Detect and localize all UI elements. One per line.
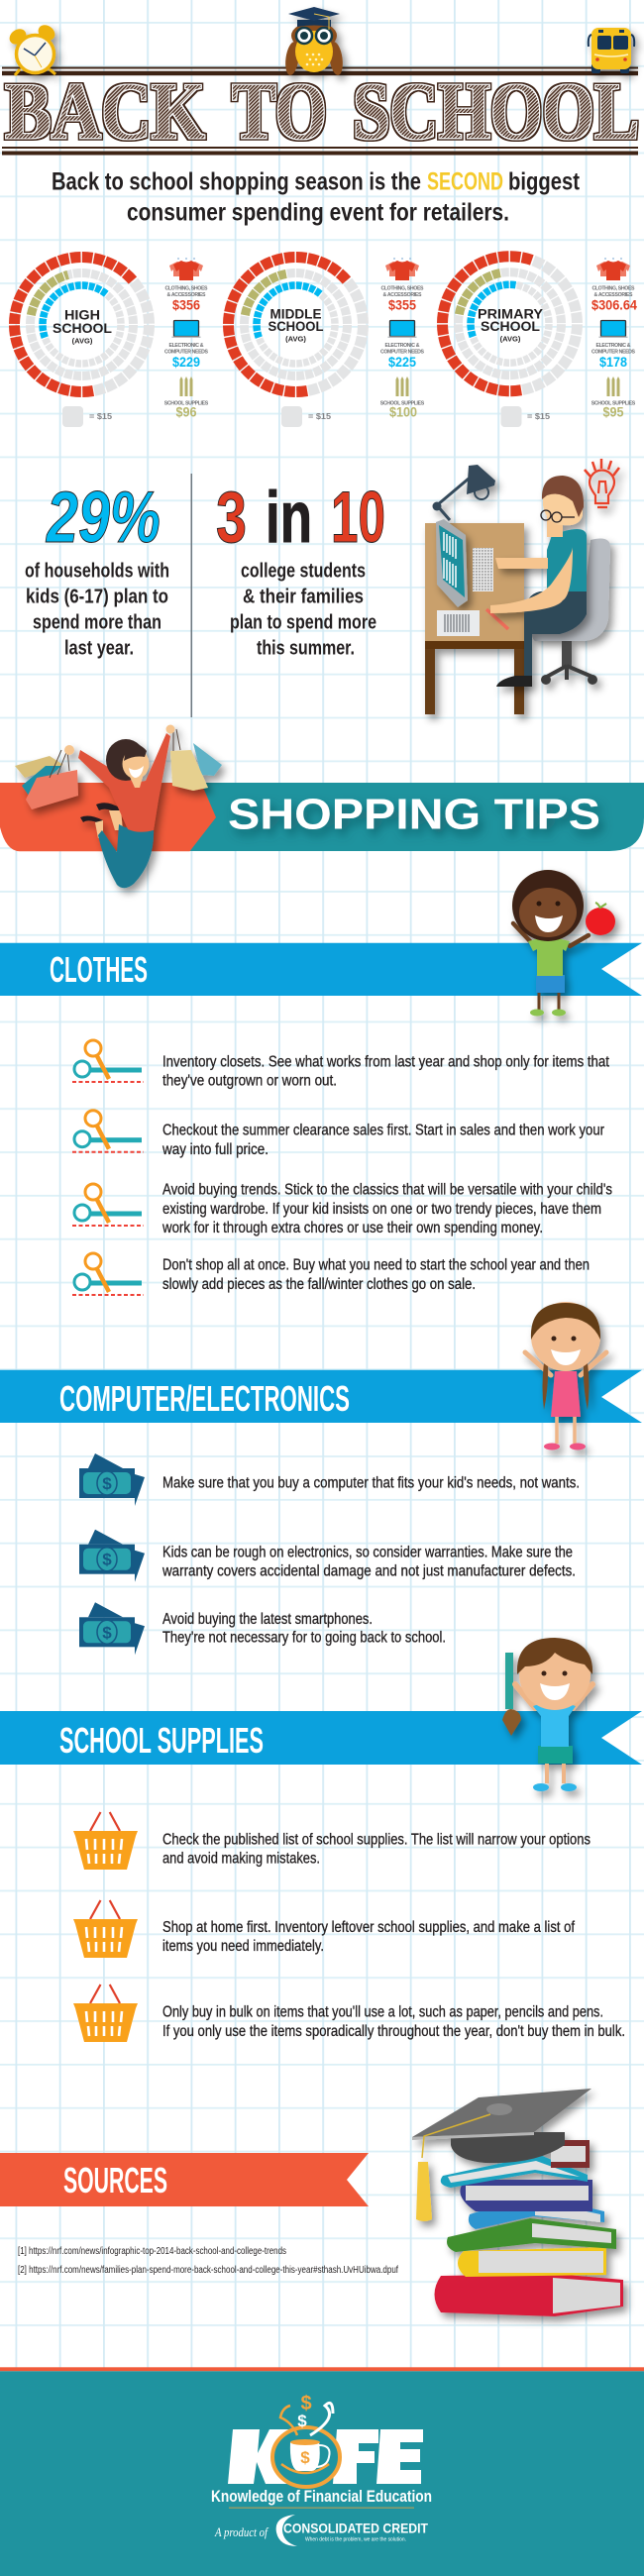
spending column: middle school: CLOTHING, SHOES: [380, 286, 424, 292]
green book: [447, 2218, 616, 2252]
paper: [437, 610, 480, 636]
text: tip 4: [162, 1257, 590, 1293]
head and hair: [106, 739, 146, 781]
spending column: primary school: ELECTRONIC &: [596, 343, 631, 349]
icon: scissors 2: [72, 1111, 144, 1152]
lower legs and feet: [95, 810, 123, 838]
ribbon: computer/electronics: COMPUTER/ELECTRONICS: [59, 1378, 350, 1419]
icon: shirts: [385, 258, 419, 280]
apple: [586, 903, 615, 935]
legs and shoes: [557, 1417, 575, 1444]
tips: computer/electronics: [79, 1453, 580, 1655]
spending column: primary school: COMPUTER NEEDS: [591, 350, 636, 356]
spending column: primary school: $178: [599, 354, 627, 370]
subtitle: SECOND: [427, 168, 503, 196]
shoes: [80, 803, 121, 824]
illustration: woman with shopping bags: [15, 725, 222, 888]
icon: money 3: $: [102, 1623, 112, 1642]
pencil: [486, 609, 508, 629]
stat: 3 in 10 college students: 10: [331, 478, 385, 558]
subtitle: [52, 168, 581, 227]
icon: shirts: [169, 258, 203, 280]
text: tip 1: [162, 1054, 609, 1090]
text: tip 3: They're not necessary for to going back to school.: [162, 1630, 446, 1647]
icon: alarm clock: [7, 22, 57, 75]
pigtails: [543, 1362, 589, 1410]
spending column: middle school: $225: [388, 354, 416, 370]
stat: 3 in 10 college students: [216, 478, 385, 660]
icon: laptop: [172, 321, 200, 338]
spending column: primary school: & ACCESSORIES: [594, 292, 633, 298]
heading: shopping tips: SHOPPING TIPS: [228, 791, 600, 838]
text: tip 1: [162, 1832, 590, 1868]
paintbrush: [502, 1653, 521, 1736]
icon: money 2: [79, 1530, 145, 1582]
text: tip 2: way into full price.: [161, 1141, 268, 1158]
chair: [531, 539, 610, 685]
stat: 29 percent of households: spend more than: [33, 611, 161, 633]
top rule lines: [2, 67, 638, 75]
title: [5, 65, 639, 157]
text: tip 2: warranty covers accidental damage and not just manufacturer defects.: [161, 1563, 576, 1580]
desk lamp: [432, 465, 495, 520]
logo: KOFE: [228, 2393, 423, 2487]
legend: high school: [62, 406, 112, 427]
head: [519, 1639, 590, 1710]
head: [512, 870, 584, 941]
stat: 3 in 10 college students: 3: [216, 478, 247, 558]
stat: 3 in 10 college students: & their families: [243, 587, 364, 608]
head: [531, 1302, 600, 1371]
text: tip 3: [161, 1182, 612, 1236]
spending column: middle school: [380, 258, 425, 420]
icon: basket 1: [73, 1812, 138, 1870]
panel: high school spending: [4, 247, 209, 427]
ribbon: computer/electronics: [0, 1370, 642, 1423]
brown book: [551, 2140, 590, 2168]
stat: 29 percent of households: of households with: [25, 561, 169, 583]
spending column: middle school: SCHOOL SUPPLIES: [380, 400, 425, 406]
panel: primary school spending: [432, 247, 637, 427]
text: tip 2: [162, 1919, 575, 1955]
footer: [0, 2367, 644, 2576]
panel: middle school spending: [218, 247, 425, 427]
shirt: [533, 1702, 576, 1747]
donut chart: high school: SCHOOL: [53, 321, 112, 336]
icon: money 2: $: [102, 1551, 112, 1569]
legs and shoes: [547, 1764, 564, 1783]
text: tip 2: [161, 1123, 605, 1158]
icon: money 1: [79, 1453, 145, 1506]
stat: 29 percent of households: kids (6-17) plan to: [26, 587, 168, 608]
legend: middle school: [281, 406, 331, 427]
coffee cup: [281, 2439, 330, 2473]
spending column: high school: ELECTRONIC &: [168, 343, 204, 349]
legend: primary school: = $15: [527, 411, 550, 421]
text: tip 3: Avoid buying the latest smartphones.: [162, 1611, 373, 1628]
title: TO: [232, 65, 327, 157]
text: tip 3: [162, 2004, 625, 2040]
teal book: [441, 2155, 588, 2188]
shorts: [538, 1746, 573, 1764]
text: tip 2: [161, 1545, 576, 1580]
ribbon: sources: [0, 2153, 369, 2206]
subtitle: Back to school shopping season is the: [52, 168, 421, 196]
keyboard: [473, 548, 493, 591]
stat: 29 percent of households: last year.: [64, 638, 134, 660]
logo: consolidated credit: When debt is the problem, we are the solution.: [305, 2537, 406, 2543]
donut chart: primary school: (AVG): [500, 335, 521, 343]
person: [490, 476, 587, 687]
donut chart: primary school: SCHOOL: [481, 319, 540, 334]
text: tip 1: they've outgrown or worn out.: [162, 1073, 337, 1090]
icon: shirts: [596, 258, 630, 280]
legs and shoes: [539, 991, 559, 1011]
ribbon: school supplies: [0, 1711, 642, 1765]
arrow: orange pointer: [0, 783, 216, 851]
spending column: high school: $356: [172, 296, 200, 312]
spending column: high school: CLOTHING, SHOES: [164, 286, 208, 292]
text: tip 4: slowly add pieces as the fall/winter clothes go on sale.: [162, 1276, 476, 1293]
spending column: middle school: & ACCESSORIES: [382, 292, 422, 298]
steam and dollar signs: $: [300, 2393, 312, 2415]
donut chart: middle school: MIDDLE: [269, 307, 321, 322]
header: [2, 7, 639, 227]
logo tagline: Knowledge of Financial Education: [211, 2487, 432, 2506]
icon: laptop: [388, 321, 416, 338]
spending column: primary school: $306.64: [591, 296, 637, 312]
product of text: A product of: [214, 2524, 269, 2539]
banner: shopping tips: [0, 783, 644, 851]
subtitle: biggest: [508, 168, 581, 196]
spending column: primary school: CLOTHING, SHOES: [592, 286, 635, 292]
legend: high school: = $15: [89, 411, 112, 421]
spending column: high school: SCHOOL SUPPLIES: [164, 400, 209, 406]
donut chart: middle school: [218, 247, 374, 402]
computer monitor: [436, 519, 468, 607]
steam and dollar signs: $: [297, 2412, 307, 2430]
subtitle: consumer spending event for retailers.: [127, 199, 509, 227]
spending column: high school: COMPUTER NEEDS: [164, 350, 209, 356]
spending column: primary school: [591, 258, 637, 420]
logo letters: [228, 2429, 423, 2484]
icon: money 1: $: [102, 1474, 112, 1493]
stat: 3 in 10 college students: in: [266, 478, 312, 558]
spending column: primary school: SCHOOL SUPPLIES: [591, 400, 636, 406]
ribbon: school supplies: SCHOOL SUPPLIES: [59, 1720, 264, 1761]
logo: consolidated credit: CONSOLIDATED CREDIT: [283, 2521, 428, 2536]
dress: [551, 1371, 581, 1417]
text: tip 2: items you need immediately.: [162, 1938, 324, 1955]
arms: [515, 1684, 592, 1708]
spending column: primary school: $95: [602, 404, 624, 420]
text: tip 3: work for it through extra chores or use their own spending money.: [161, 1220, 543, 1236]
icon: pencils: [396, 376, 408, 396]
ribbon: sources: SOURCES: [63, 2160, 167, 2200]
donut chart: primary school: [432, 247, 588, 401]
icon: pencils: [606, 376, 620, 396]
text: tip 3: [162, 1611, 446, 1647]
stat: 3 in 10 college students: this summer.: [257, 638, 355, 660]
illustration: boy with paintbrush: [502, 1638, 592, 1791]
steam and dollar signs: [280, 2393, 333, 2435]
logo: consolidated credit: [276, 2515, 428, 2546]
text: tip 1: and avoid making mistakes.: [162, 1851, 320, 1868]
donut chart: high school: [4, 247, 160, 402]
donut chart: primary school: PRIMARY: [478, 307, 543, 322]
tips: school supplies: [73, 1812, 625, 2042]
spending column: high school: & ACCESSORIES: [166, 292, 206, 298]
donut chart: high school: HIGH: [64, 308, 100, 323]
coffee cup ring: [272, 2427, 340, 2487]
desk: [425, 523, 524, 714]
legend: primary school: [501, 406, 550, 427]
icon: laptop: [598, 321, 628, 338]
icon: scissors 3: [72, 1184, 144, 1226]
spending column: high school: $96: [176, 404, 197, 420]
icon: money 3: [79, 1602, 145, 1655]
coffee cup: $: [300, 2448, 310, 2467]
ribbon: clothes: CLOTHES: [50, 949, 148, 990]
spending column: high school: [164, 258, 209, 420]
arms: [513, 923, 589, 946]
stat: 29 percent of households: 29%: [45, 478, 161, 558]
title: BACK: [5, 65, 205, 157]
spending column: high school: $229: [172, 354, 200, 370]
source links: [2] https://nrf.com/news/families-plan-spend-more-back-school-and-college-this-year#sthash.UvHUibwa.dpuf: [18, 2265, 398, 2276]
donut chart: high school: (AVG): [72, 337, 93, 345]
graduation cap: [412, 2089, 591, 2221]
spending column: middle school: $100: [389, 404, 417, 420]
bottom rule lines: [2, 147, 638, 155]
stat: 3 in 10 college students: college students: [241, 561, 366, 583]
arms: [525, 1352, 606, 1375]
spending column: middle school: $355: [388, 296, 416, 312]
shirt: [528, 938, 570, 976]
blue book: [469, 2195, 604, 2229]
red book: [434, 2274, 623, 2316]
shorts: [536, 975, 565, 993]
icon: basket 2: [73, 1900, 138, 1958]
source links: [18, 2246, 398, 2276]
icon: owl with graduation cap: [283, 7, 345, 76]
icon: basket 3: [73, 1985, 138, 2042]
illustration: boy with apple: [512, 870, 615, 1017]
shopping bags right: [170, 729, 222, 791]
yellow book: [458, 2247, 606, 2277]
ribbon: clothes: [0, 943, 642, 996]
icon: scissors 1: [72, 1040, 144, 1082]
hands: [64, 725, 174, 755]
icon: school bus: [589, 28, 634, 73]
illustration: student at desk: [425, 459, 619, 714]
stat: 29 percent of households: [25, 478, 169, 660]
stat: 3 in 10 college students: plan to spend more: [230, 611, 376, 633]
spending column: middle school: ELECTRONIC &: [384, 343, 420, 349]
source links: [1] https://nrf.com/news/infographic-top-2014-back-school-and-college-trends: [18, 2246, 286, 2257]
icon: light bulb: [585, 459, 619, 507]
donut chart: middle school: SCHOOL: [268, 319, 323, 334]
shopping bags left: [15, 750, 78, 809]
illustration: stack of books with graduation cap: [412, 2089, 623, 2316]
legend: middle school: = $15: [308, 411, 331, 421]
tips: clothes: [72, 1040, 612, 1295]
icon: pencils: [180, 376, 192, 396]
icon: scissors 4: [72, 1253, 144, 1295]
navy book: [460, 2180, 592, 2211]
donut chart: middle school: (AVG): [285, 335, 306, 343]
spending column: middle school: COMPUTER NEEDS: [380, 350, 425, 356]
illustration: girl with pigtails: [525, 1302, 606, 1450]
legs and pants: [98, 824, 154, 888]
torso and arms: [78, 733, 170, 832]
